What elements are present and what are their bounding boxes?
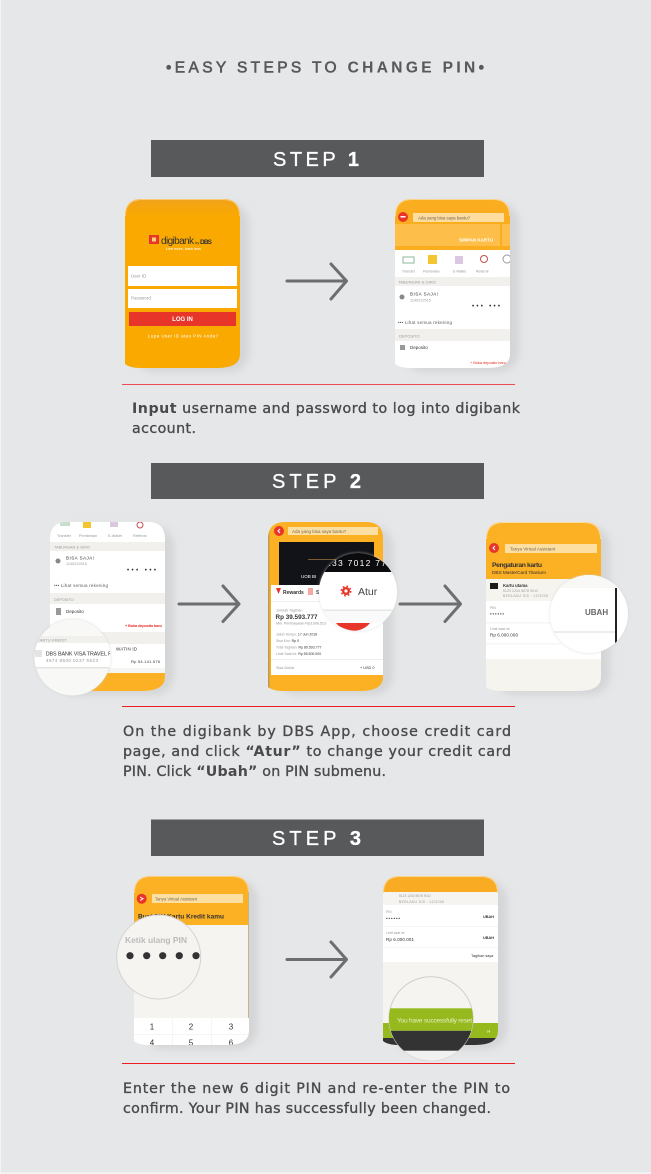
magnifier: success message <box>388 977 474 1063</box>
rewards row: S <box>316 590 320 596</box>
icons row: Transfer <box>57 534 72 538</box>
accounts rows: + Buka deposito baru <box>125 623 163 628</box>
phone: digibank login <box>125 199 249 372</box>
page heading <box>492 562 546 574</box>
logo: Live more, bank less <box>166 246 201 251</box>
accounts rows: WATIN ID <box>116 646 138 652</box>
icons row: Referral <box>133 534 147 538</box>
step 1 heading: STEP 1 <box>273 149 359 171</box>
accounts section: BISA SAJA! <box>410 292 438 296</box>
limit row: Limit saat ini <box>386 931 405 935</box>
step 2 description <box>123 724 511 780</box>
Atur label: Atur <box>358 586 378 598</box>
magnifier: Atur <box>318 552 398 632</box>
arrow 3 <box>400 586 460 622</box>
PIN row: PIN <box>386 910 392 914</box>
limit row: Rp 6.000.000 <box>490 632 518 638</box>
step 3 description <box>123 1081 510 1117</box>
keypad: 4 <box>150 1038 155 1048</box>
logo: digibank <box>161 236 195 247</box>
quick icons: Transfer <box>402 270 416 274</box>
accounts rows: DEPOSITO <box>54 598 74 602</box>
arrow 2 <box>179 586 239 622</box>
search bar: Ada yang bisa saya bantu? <box>292 529 347 534</box>
balance: Total Tagihan: Rp 89.593.777 <box>276 646 322 650</box>
password field <box>128 289 237 308</box>
divider step 3 <box>122 1063 515 1064</box>
login button: LOG IN <box>172 317 193 323</box>
main card row: 5123 1234 5678 9012 <box>503 589 538 593</box>
step 3 heading: STEP 3 <box>272 828 361 850</box>
accounts rows: Rp 54.141.576 <box>131 659 161 664</box>
phone: enter new PIN <box>134 876 258 1049</box>
main card row: BERLAKU S/D : 12/2026 <box>503 594 548 598</box>
rewards row <box>271 588 320 602</box>
password field: Password <box>131 296 151 300</box>
step 3 description: confirm. Your PIN has successfully been changed. <box>123 1101 491 1117</box>
accounts rows: TABUNGAN & GIRO <box>54 546 90 550</box>
accounts section: DEPOSITO <box>399 334 420 338</box>
phone: accounts list <box>50 522 174 695</box>
accounts section <box>395 277 510 365</box>
username field: User ID <box>131 274 147 278</box>
logo <box>149 235 213 251</box>
accounts rows: BISA SAJA! <box>66 556 94 560</box>
PIN row <box>490 606 504 614</box>
limit row <box>383 927 498 947</box>
accounts section: 1140212515 <box>410 298 431 302</box>
accounts section: ••• Lihat semua rekening <box>398 320 452 325</box>
accounts rows <box>50 542 166 673</box>
PIN row: •••••• <box>386 916 400 921</box>
icons row: Pembelian <box>79 534 97 538</box>
more link: Tagihan saya <box>471 954 494 958</box>
arrow 1 <box>287 264 346 299</box>
step 1 banner <box>151 140 484 177</box>
username field <box>128 266 237 286</box>
page heading: DBS MasterCard Titanium <box>492 570 546 576</box>
PIN row: PIN <box>490 606 496 610</box>
magnifier: Atur: 4233 7012 77 <box>320 558 386 568</box>
arrow 4 <box>287 942 346 977</box>
quick icons: Pembelian <box>423 270 440 274</box>
accounts rows: ••• Lihat semua rekening <box>54 583 108 588</box>
search bar: Tanya Virtual Assistant <box>510 546 556 552</box>
main card row <box>490 583 548 598</box>
limit row: Rp 6.000.001 <box>386 937 414 942</box>
limit row: UBAH <box>483 936 494 940</box>
banner text: SIMPAN KARTU <box>459 238 493 242</box>
step 2 description: On the digibank by DBS App, choose credit card <box>123 724 511 740</box>
back button <box>489 543 499 553</box>
search bar <box>413 213 504 222</box>
PIN row: •••••• <box>490 612 504 616</box>
keypad <box>134 1018 249 1048</box>
magnifier: retype PIN <box>117 915 201 999</box>
step 2 heading: STEP 2 <box>272 471 361 493</box>
accounts section: TABUNGAN & GIRO <box>398 280 436 284</box>
PIN row: UBAH <box>483 915 494 919</box>
success message: You have successfully reset <box>397 1018 472 1024</box>
magnifier: Ubah <box>549 574 629 654</box>
balance: Sisa Kini: Rp 0 <box>276 639 299 643</box>
icons row: E-Wallet <box>108 534 123 538</box>
keypad: 5 <box>189 1038 194 1048</box>
step 2 description: page, and click “Atur” to change your credit card <box>123 744 511 760</box>
rewards row: Rewards <box>283 590 304 596</box>
Ubah label: UBAH <box>585 608 608 617</box>
card name: DBS BANK VISA TRAVEL P <box>46 652 112 658</box>
magnifier: credit card <box>34 619 112 697</box>
search bar <box>288 527 378 535</box>
magnifier: credit card: KARTU KREDIT <box>37 638 68 642</box>
login button <box>129 312 236 326</box>
search bar: Tanya Virtual Assistant <box>155 896 198 902</box>
accounts section: + Buka deposito baru <box>470 360 506 365</box>
red arc <box>336 623 370 631</box>
limit row <box>490 627 518 638</box>
keypad: 1 <box>150 1022 155 1032</box>
phone: PIN changed <box>383 876 507 1049</box>
success bar: ›‹ <box>487 1029 491 1035</box>
accounts rows: ••• ••• <box>127 568 156 574</box>
more link <box>383 948 498 962</box>
quick icons: Referral <box>476 270 489 274</box>
quick icons: E-Wallet <box>453 270 466 274</box>
magnifier: credit card: 4574 8500 0237 5523 <box>46 658 98 663</box>
accounts rows: Deposito <box>66 609 84 614</box>
step 2 description: PIN. Click “Ubah” on PIN submenu. <box>123 764 386 780</box>
step 1 description: account. <box>132 421 196 437</box>
keypad: 6 <box>229 1038 234 1048</box>
divider step 2 <box>122 706 515 707</box>
search bar <box>505 544 597 553</box>
black card image <box>279 542 374 585</box>
keypad: 3 <box>229 1022 234 1032</box>
step 3 banner <box>151 820 484 856</box>
search bar <box>152 894 243 903</box>
logo: by <box>195 240 199 245</box>
back button <box>274 526 284 536</box>
balance: Sisa Dollar <box>276 666 295 670</box>
balance: Min. Pembayaran Rp3.608.513 <box>276 622 326 626</box>
accounts section: ••• ••• <box>472 304 500 310</box>
accounts rows: 1140212515 <box>66 562 87 566</box>
PIN dots <box>126 952 200 959</box>
phone: digibank home <box>395 199 519 372</box>
bottom bar <box>90 673 165 691</box>
search bar: Ada yang bisa saya bantu? <box>418 216 470 220</box>
menu button <box>398 212 408 222</box>
step 1 description <box>132 401 521 437</box>
card numbers <box>399 894 444 904</box>
limit row: Limit saat ini <box>490 627 510 631</box>
back button <box>137 894 147 904</box>
quick icons <box>402 255 511 274</box>
accounts section: Deposito <box>410 345 428 350</box>
title: •EASY STEPS TO CHANGE PIN• <box>166 60 484 76</box>
card numbers: 5123 1234 5678 9012 <box>399 894 431 898</box>
gear icon <box>341 586 351 596</box>
keypad: 2 <box>189 1022 194 1032</box>
PIN row <box>383 905 498 926</box>
step 2 banner <box>151 463 484 499</box>
balance: Rp 39.593.777 <box>276 614 318 621</box>
success bar <box>383 1023 498 1045</box>
retype label: Ketik ulang PIN <box>125 935 187 945</box>
balance: + USD 0 <box>360 666 374 670</box>
phone: credit card page <box>268 522 393 695</box>
black card image: UOB BI <box>301 574 316 579</box>
balance <box>271 608 383 670</box>
page heading: Buat PIN Kartu Kredit kamu <box>138 914 224 920</box>
balance: Jumlah Tagihan <box>276 608 303 612</box>
step 1 description: Input username and password to log into digibank <box>132 401 521 417</box>
icons row <box>57 522 147 538</box>
balance: Limit Saat Ini: Rp 55.500.000 <box>276 652 321 656</box>
help link: Lupa User ID atau PIN Anda? <box>148 334 218 338</box>
page heading: Pengaturan kartu <box>492 562 542 569</box>
step 3 description: Enter the new 6 digit PIN and re-enter the PIN to <box>123 1081 510 1097</box>
logo: DBS <box>200 239 213 246</box>
divider step 1 <box>122 384 515 385</box>
phone: card settings <box>486 522 610 695</box>
balance: Jatuh Tempo: 17 Jun 2018 <box>276 632 317 636</box>
main card row: Kartu utama <box>503 583 528 588</box>
card numbers: BERLAKU S/D : 12/2026 <box>399 900 444 904</box>
